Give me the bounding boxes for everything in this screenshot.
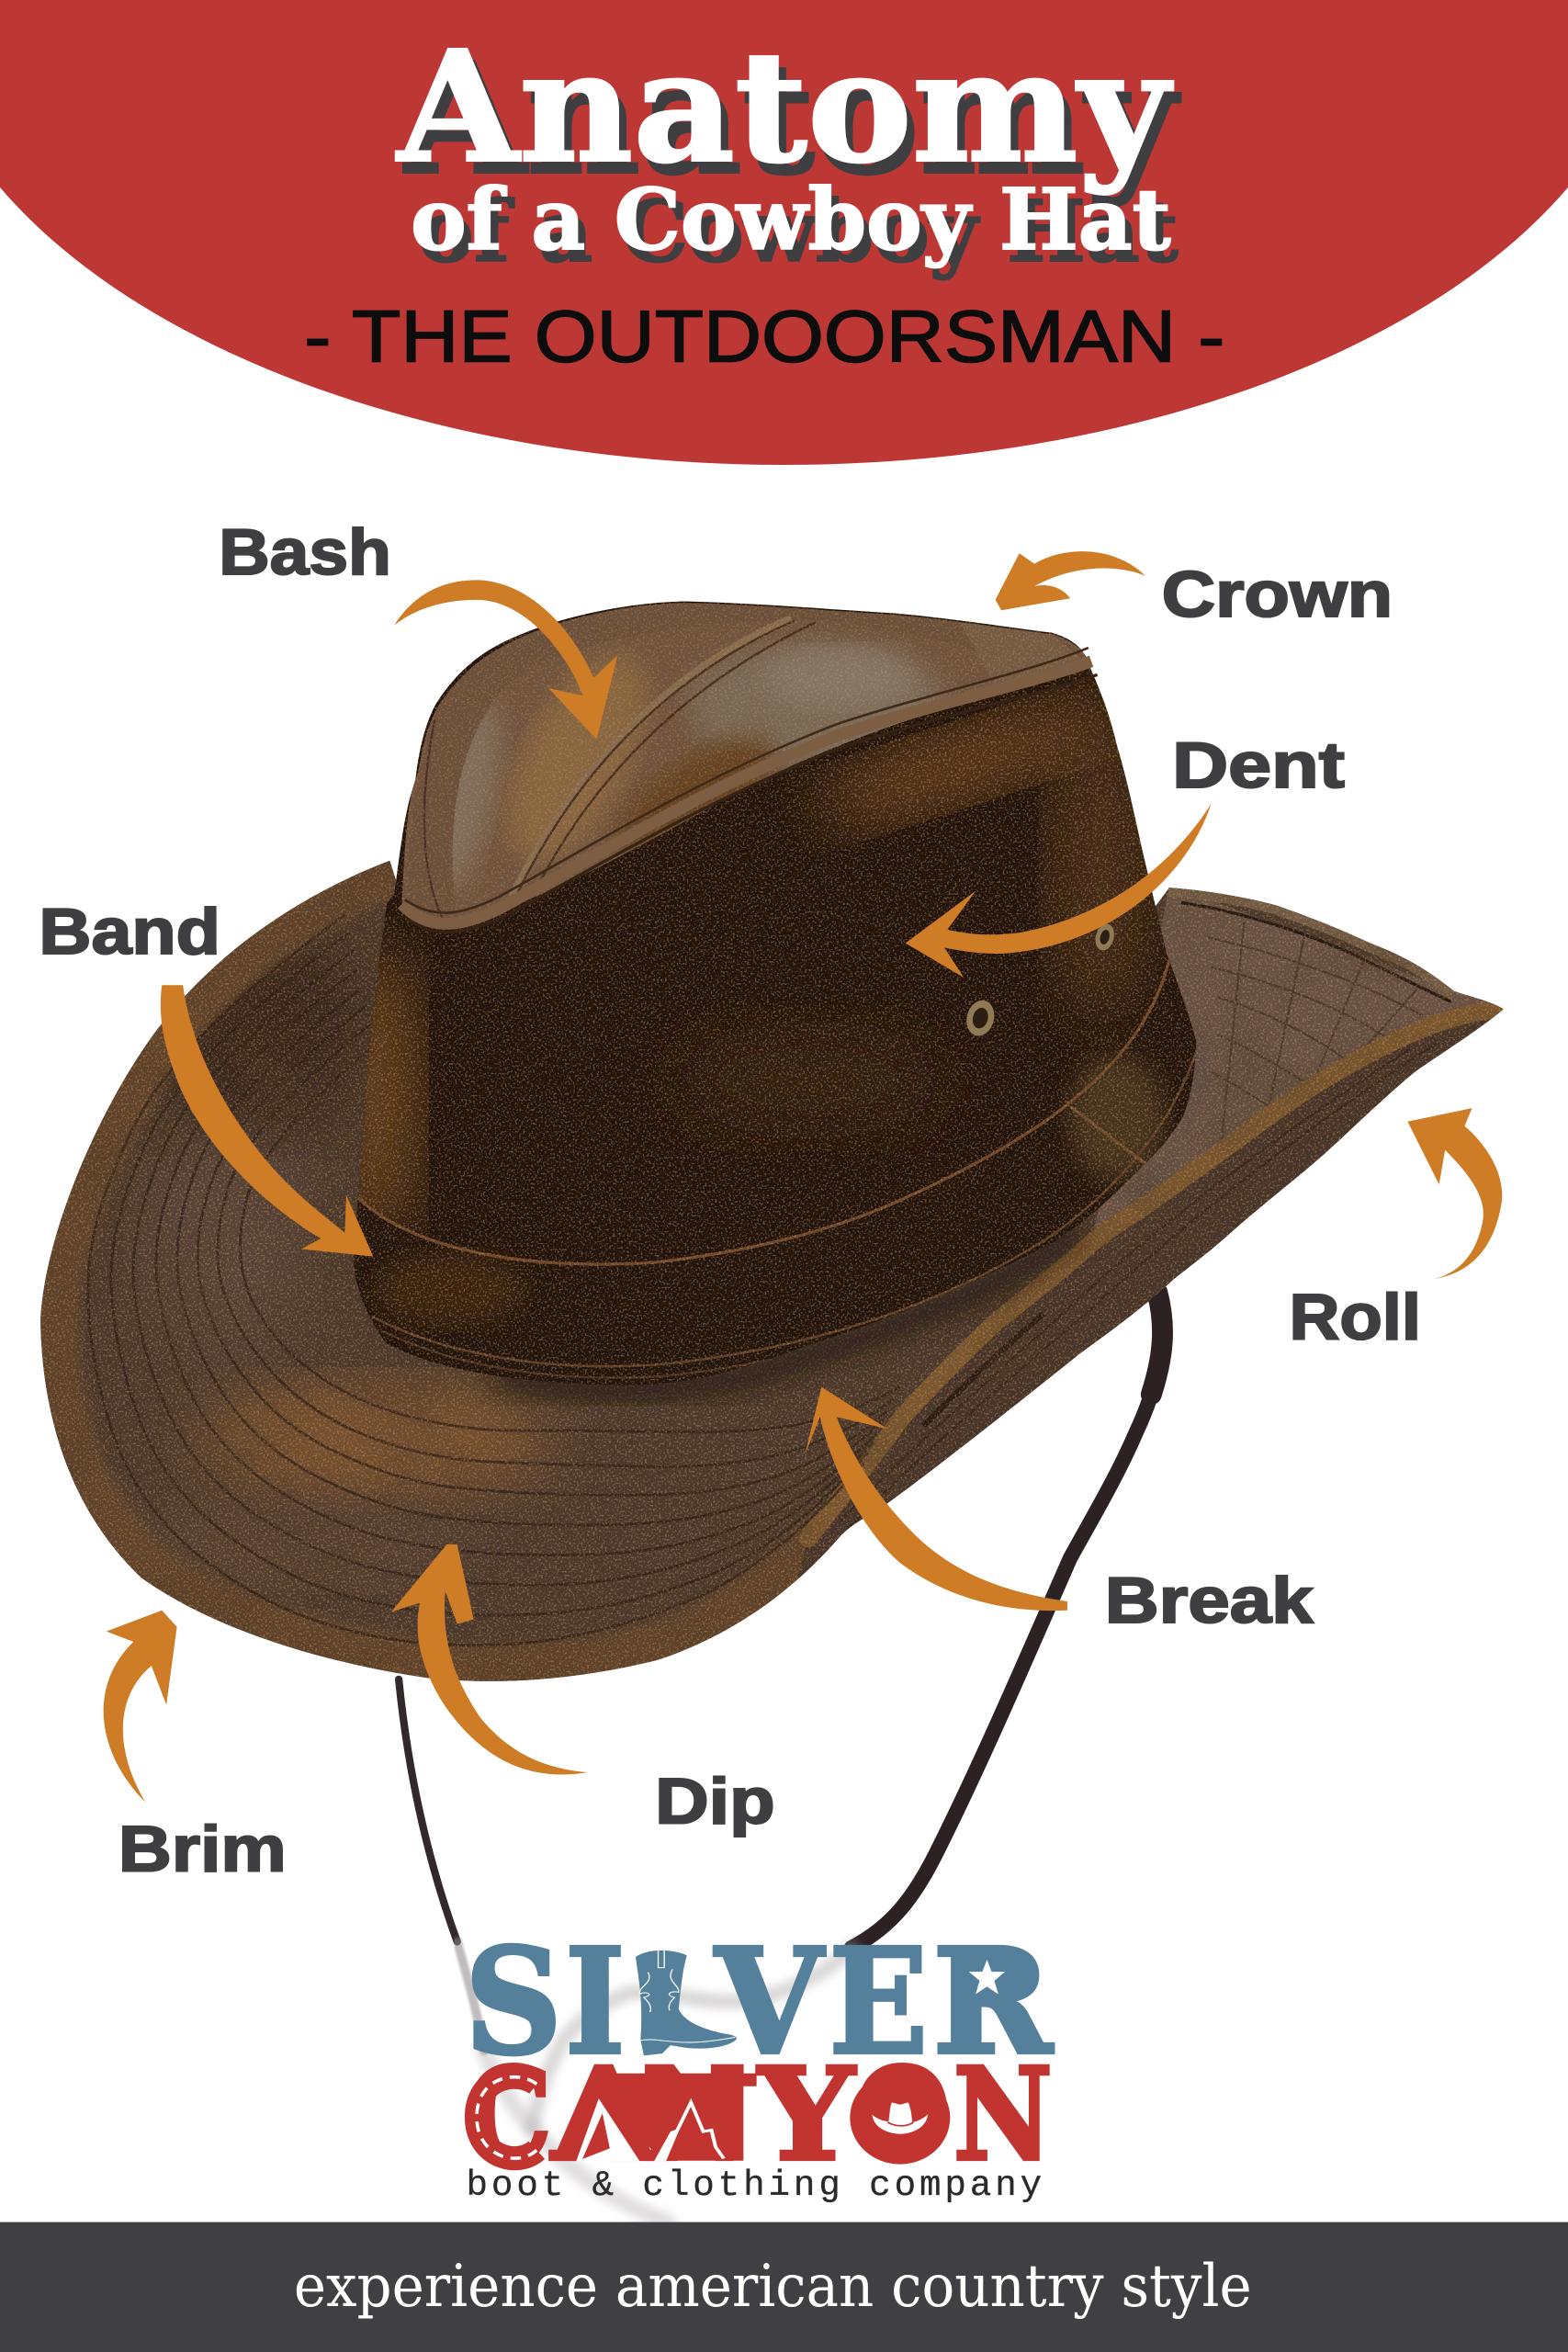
footer tagline: experience american country style <box>294 2253 1252 2321</box>
label: Band: Band <box>39 895 220 967</box>
eyelet rear <box>1092 922 1117 953</box>
crown <box>330 600 1214 1395</box>
logo word: Silver: V <box>714 1917 826 2087</box>
title: of a Cowboy Hat: of a Cowboy Hat <box>418 182 1179 281</box>
stitched rings <box>88 915 899 1645</box>
logo word: Canyon: O <box>854 2040 951 2189</box>
brim right side <box>1093 888 1484 1229</box>
arrow: Crown <box>996 551 1145 610</box>
label: Dent: Dent <box>1172 729 1345 801</box>
under brim <box>797 1009 1503 1580</box>
horseshoe C body <box>477 2077 536 2158</box>
arrow: Dent <box>906 804 1212 978</box>
label: Crown: Crown <box>1162 558 1393 630</box>
arrow: Break <box>805 1387 1067 1611</box>
label: Brim: Brim <box>118 1813 287 1885</box>
logo word: Silver: I <box>565 1917 626 2087</box>
arrow: Brim <box>104 1611 177 1803</box>
subtitle: - THE OUTDOORSMAN - <box>304 295 1224 377</box>
bash and dent top <box>402 603 1086 918</box>
eyelet front <box>963 997 998 1039</box>
logo tagline: boot & clothing company <box>467 2165 1042 2206</box>
icon: cowboy boot <box>636 1950 737 2055</box>
brim edge band <box>40 861 841 1681</box>
logo word: Canyon: N <box>641 2040 747 2189</box>
arrow: Roll <box>1407 1108 1502 1279</box>
logo word: Silver: R <box>932 1917 1054 2087</box>
icon: star <box>969 1960 1005 1995</box>
O body <box>850 2071 950 2165</box>
R bowl fill <box>959 1955 1016 2000</box>
label: Break: Break <box>1105 1564 1314 1636</box>
logo: Silver Canyon <box>465 1917 1054 2206</box>
shadow under band <box>495 1229 1079 1390</box>
label: Dip: Dip <box>655 1765 775 1838</box>
chin strap <box>399 1293 1163 2222</box>
hat photo <box>40 601 1504 1681</box>
label: Bash: Bash <box>219 515 391 588</box>
arrow: Band <box>161 985 373 1257</box>
horseshoe stitching <box>477 2077 536 2158</box>
logo word: Canyon: N <box>953 2040 1053 2189</box>
footer bar <box>0 2222 1568 2352</box>
mountain shapes in A and N <box>551 2074 757 2161</box>
brim <box>40 860 1504 1681</box>
logo word: Silver: S <box>465 1917 562 2087</box>
arrow: Bash <box>394 580 617 740</box>
red title banner <box>0 0 1568 465</box>
roll edge <box>808 1009 1504 1538</box>
title: Anatomy: Anatomy <box>395 18 1173 198</box>
icon: hat in O <box>872 2102 928 2134</box>
crown ridge stitching <box>401 648 1098 932</box>
logo word: Silver <box>465 1917 1054 2087</box>
logo word: Canyon: Y <box>757 2040 856 2189</box>
logo word: Canyon: C <box>467 2040 552 2189</box>
logo word: Canyon: A <box>549 2040 659 2189</box>
title: Anatomy: Anatomy <box>403 30 1180 209</box>
arrow: Dip <box>391 1544 588 1774</box>
logo word: Canyon <box>467 2040 1053 2189</box>
hat band <box>356 960 1214 1392</box>
logo word: Silver: E <box>829 1917 928 2087</box>
title: of a Cowboy Hat: of a Cowboy Hat <box>411 170 1171 269</box>
label: Roll: Roll <box>1289 1280 1421 1352</box>
